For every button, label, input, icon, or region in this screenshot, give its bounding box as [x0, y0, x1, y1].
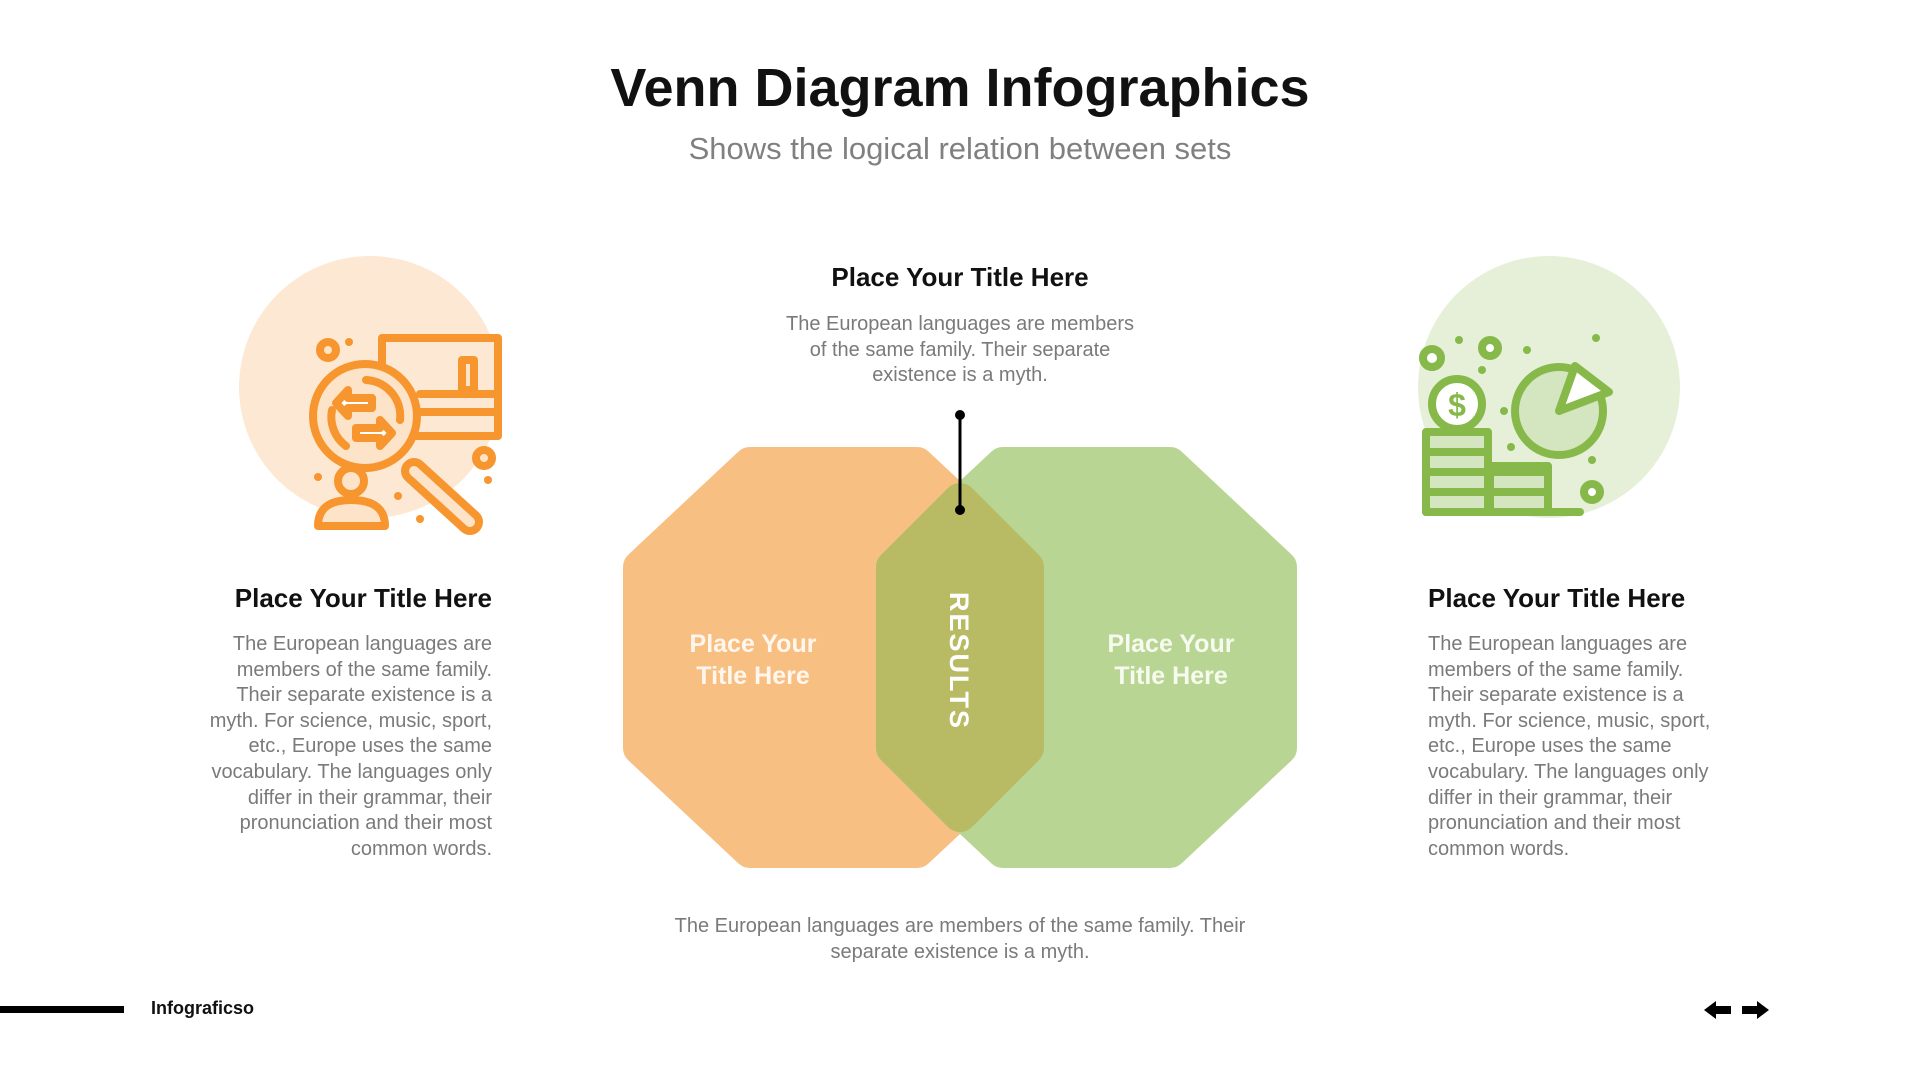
left text: differ in their grammar, their: [248, 787, 492, 809]
right text: Their separate existence is a: [1428, 684, 1684, 706]
shape: intersection: [893, 500, 1027, 815]
bottom text: separate existence is a myth.: [830, 941, 1090, 963]
right text: vocabulary. The languages only: [1428, 761, 1709, 783]
right text: etc., Europe uses the same: [1428, 735, 1671, 757]
label: right set: Title Here: [1114, 662, 1228, 690]
right text: The European languages are: [1428, 633, 1687, 655]
bottom text: [675, 915, 1245, 963]
right text: pronunciation and their most: [1428, 812, 1680, 834]
left text: pronunciation and their most: [240, 812, 492, 834]
left text: The European languages are: [233, 633, 492, 655]
shape: orange octagon: [640, 464, 1027, 851]
connector line: [955, 410, 965, 515]
left text: [210, 633, 492, 860]
icon: green background circle: [1418, 256, 1680, 518]
label: results: RESULTS: [944, 592, 974, 730]
top center text: [786, 313, 1134, 386]
label: left set: Place Your: [690, 630, 816, 658]
shape: green octagon: [893, 464, 1280, 851]
icon: analysis magnifier: [313, 338, 498, 526]
left text: common words.: [351, 838, 492, 860]
right text: [1428, 633, 1710, 860]
left text: etc., Europe uses the same: [249, 735, 492, 757]
top center text: of the same family. Their separate: [810, 339, 1110, 361]
subtitle: Shows the logical relation between sets: [689, 131, 1231, 166]
right text: members of the same family.: [1428, 659, 1683, 681]
right title: Place Your Title Here: [1428, 583, 1685, 613]
icon: orange background circle: [239, 256, 501, 518]
left title: Place Your Title Here: [235, 583, 492, 613]
arrows: [1704, 1001, 1769, 1019]
footer brand: Infograficso: [151, 998, 254, 1018]
top center title: Place Your Title Here: [831, 262, 1089, 292]
venn diagram: $: [1448, 387, 1466, 423]
right text: common words.: [1428, 838, 1569, 860]
label: right set: Place Your: [1108, 630, 1234, 658]
bottom text: The European languages are members of the same family. Their: [675, 915, 1245, 937]
right text: myth. For science, music, sport,: [1428, 710, 1710, 732]
title: Venn Diagram Infographics: [610, 58, 1310, 118]
icon: money and pie chart: [1423, 340, 1609, 512]
top center text: existence is a myth.: [872, 364, 1048, 386]
left text: vocabulary. The languages only: [211, 761, 492, 783]
left text: myth. For science, music, sport,: [210, 710, 492, 732]
right text: differ in their grammar, their: [1428, 787, 1672, 809]
left text: members of the same family.: [237, 659, 492, 681]
left text: Their separate existence is a: [236, 684, 492, 706]
label: left set: Title Here: [696, 662, 810, 690]
top center text: The European languages are members: [786, 313, 1134, 335]
footer bar: [0, 1006, 124, 1013]
